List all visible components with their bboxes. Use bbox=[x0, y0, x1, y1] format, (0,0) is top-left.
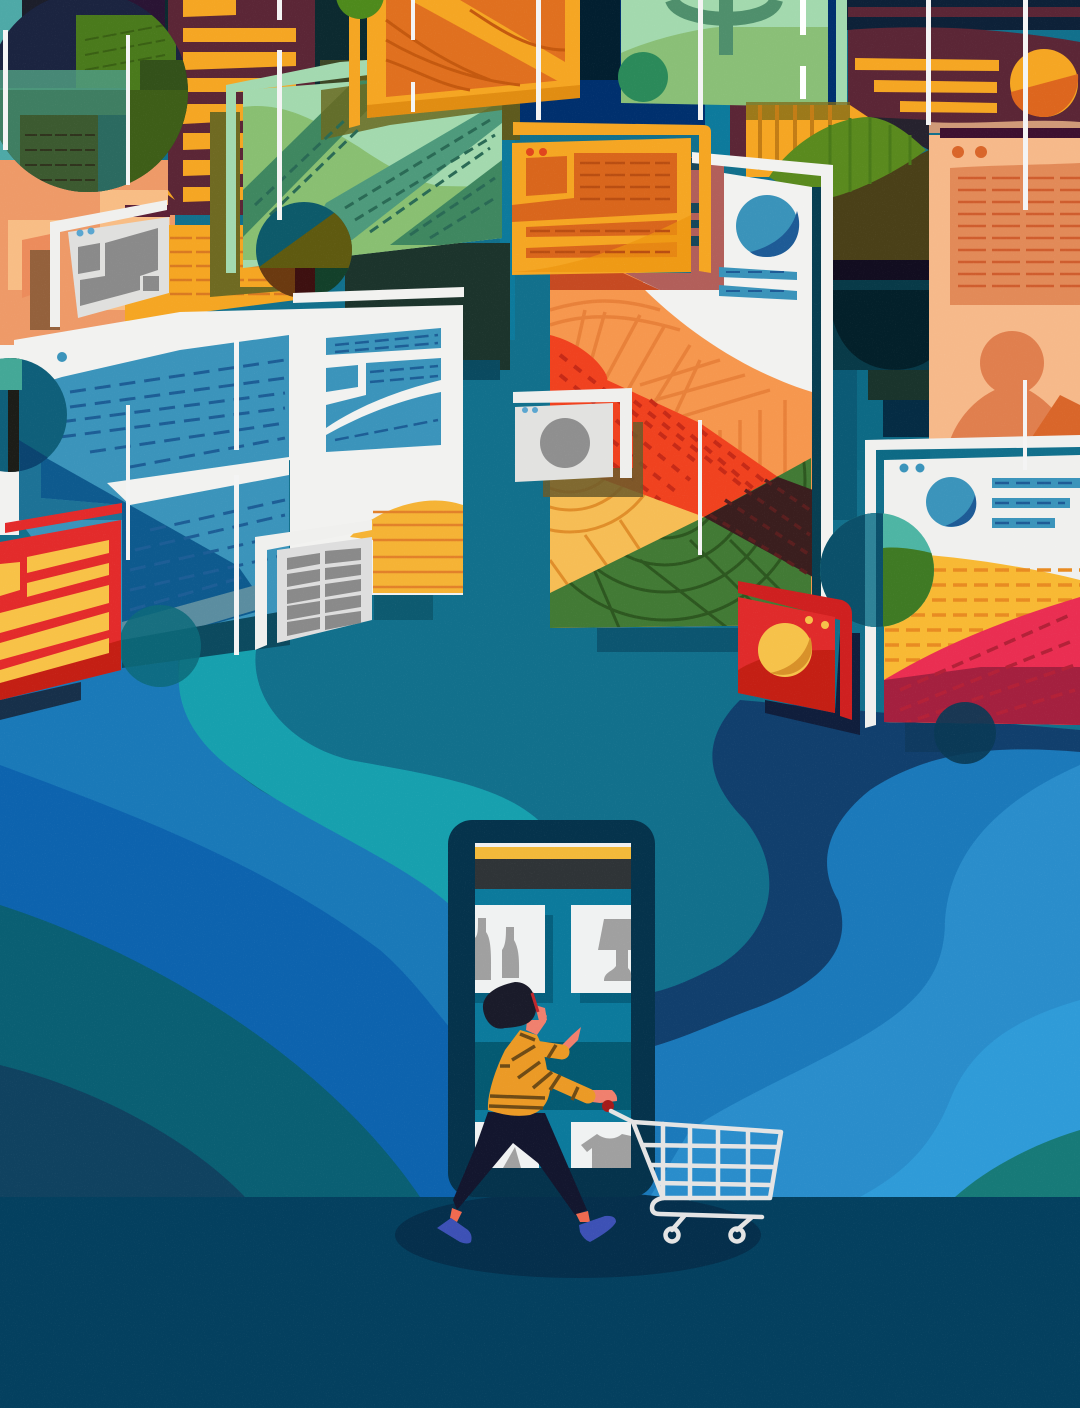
strip: teal green translucent band bbox=[0, 70, 128, 90]
panel: large blue and white web page bbox=[0, 287, 510, 668]
product: t-shirt bbox=[571, 1122, 631, 1168]
sweater stripes bbox=[489, 1034, 578, 1108]
band: white divider across blue page bbox=[107, 457, 289, 505]
product: partial item bbox=[475, 1122, 539, 1168]
circle: green small top bbox=[336, 0, 384, 19]
background wave: green band bbox=[0, 905, 420, 1197]
background wave: lightest blue right bbox=[860, 1000, 1080, 1197]
background wave: navy right flow bbox=[640, 700, 1080, 1197]
background wave: green corner bbox=[955, 1130, 1080, 1197]
icon: blue circle bbox=[736, 195, 798, 257]
circle: dark teal mid circle bbox=[255, 200, 355, 300]
panel: orange page top centre bbox=[349, 0, 580, 128]
legs bbox=[453, 1112, 587, 1215]
panel: striped orange and leaf region bbox=[746, 102, 929, 370]
grip hand bbox=[592, 1090, 617, 1103]
block: blue text column bbox=[19, 335, 289, 660]
background wave: teal flow bbox=[179, 650, 560, 1000]
neck and face bbox=[526, 1005, 547, 1035]
shadow ellipse under shopper bbox=[395, 1192, 761, 1278]
card: small grey page with grid bbox=[255, 520, 372, 650]
background wave: navy band bbox=[0, 1065, 245, 1197]
panel: salmon page far left bbox=[0, 160, 175, 350]
panel: right tan page with person icon bbox=[929, 121, 1080, 440]
circle: green badge bbox=[618, 52, 668, 102]
phone screen bbox=[475, 843, 631, 1168]
circle: translucent teal low bbox=[119, 605, 201, 687]
panel: green page with dollar icon bbox=[618, 0, 847, 110]
shopping cart bbox=[611, 1111, 781, 1242]
background wave: lighter blue right bbox=[650, 765, 1080, 1197]
panel: orange striped text page bbox=[125, 225, 296, 322]
icon: orange sun circle bbox=[1010, 49, 1078, 117]
floor bbox=[0, 1197, 1080, 1408]
sweater body bbox=[488, 1030, 550, 1116]
panel: green striped page bbox=[226, 50, 502, 273]
panel: olive shadow behind green page bbox=[210, 60, 520, 370]
shoes bbox=[437, 1216, 616, 1244]
product shadows bbox=[475, 915, 631, 1003]
card: red page left with yellow rows bbox=[0, 503, 122, 720]
card: small grey page upper left bbox=[50, 200, 169, 327]
background wave: blue right bbox=[640, 749, 1080, 1197]
icon: blue circle bbox=[926, 477, 976, 527]
sweater arms bbox=[530, 1048, 588, 1096]
circle: left dark translucent bbox=[0, 358, 67, 472]
circle: big dark green circle bbox=[0, 0, 188, 192]
block: blue top-right boxes bbox=[326, 328, 441, 355]
product: wine bottles bbox=[475, 905, 545, 993]
card: small white page with grey circle bbox=[513, 388, 643, 497]
panel: white card frame bbox=[692, 152, 833, 605]
panel: orange card centre bbox=[512, 122, 711, 275]
shadow under tall page bbox=[597, 628, 738, 652]
phone bbox=[448, 820, 655, 1197]
shopper bbox=[437, 982, 617, 1244]
icon: person silhouette bbox=[950, 331, 1075, 440]
top collage backdrop bbox=[0, 0, 1080, 520]
background wave: blue left band bbox=[0, 640, 470, 1197]
shape: yellow striped dome bbox=[350, 500, 463, 620]
panel: top-left dark strip and teal edge bbox=[0, 0, 165, 160]
background wave: deep blue band bbox=[0, 765, 470, 1197]
block: dark diagonal overlay bbox=[41, 455, 256, 650]
panel: wine page with orange text rows bbox=[125, 0, 315, 217]
card: red page with yellow circle bbox=[738, 581, 860, 735]
card: right web page with yellow and red bands bbox=[865, 435, 1080, 752]
vertical white rain lines bbox=[3, 0, 1028, 655]
icon: yellow circle bbox=[758, 623, 812, 677]
icon: dollar sign bbox=[672, 0, 776, 55]
panel: tall page with white top and patterned bands bbox=[550, 152, 833, 628]
ankles bbox=[450, 1208, 590, 1222]
pointing hand bbox=[562, 1027, 581, 1050]
circle: teal translucent right bbox=[820, 513, 934, 627]
hair bbox=[483, 982, 536, 1029]
text lines: blue page dashes bbox=[60, 360, 285, 610]
product: lamp bbox=[571, 905, 631, 993]
circle: dark low right bbox=[934, 702, 996, 764]
panel: wine page top right bbox=[848, 27, 1080, 125]
